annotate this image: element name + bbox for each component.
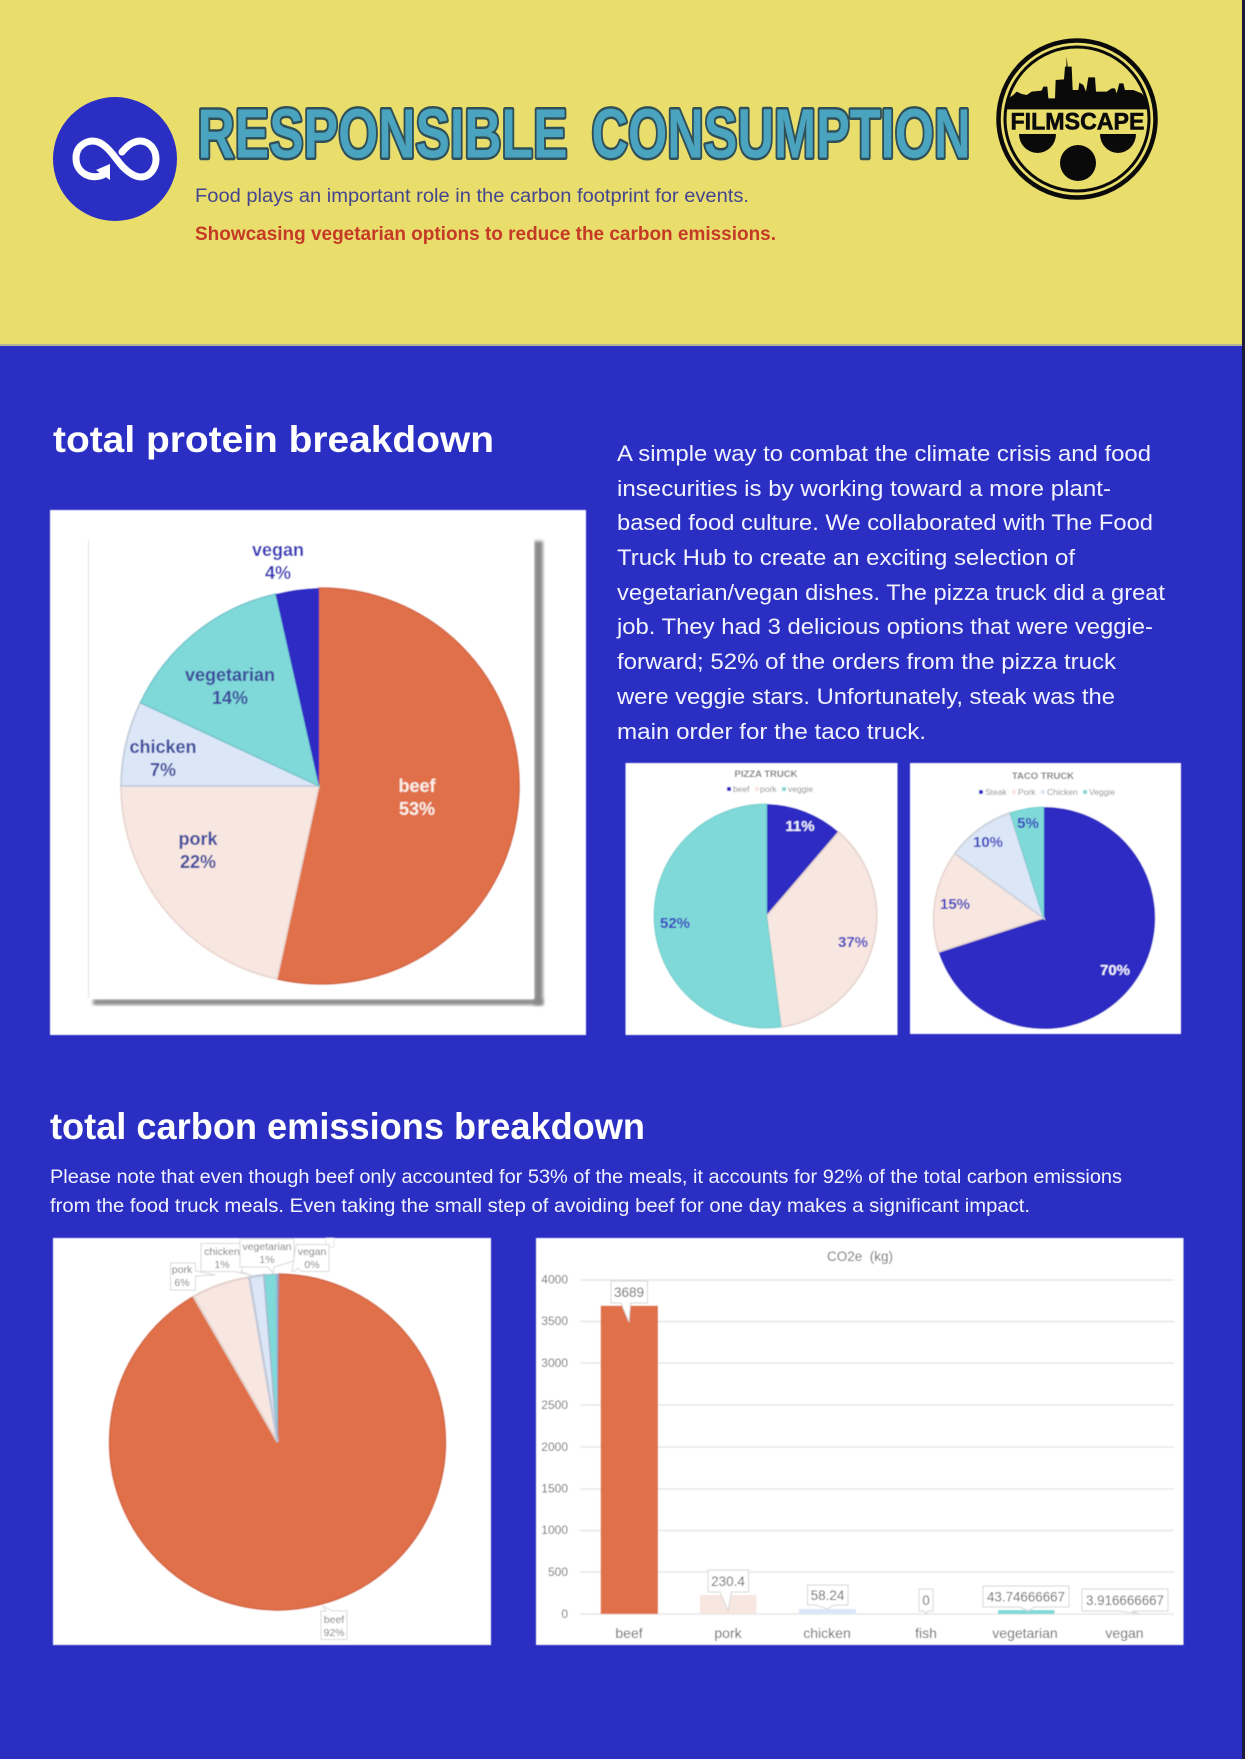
pie labels: 37% [838,934,868,951]
category labels: vegetarian [992,1625,1058,1641]
gridlines and y axis: 4000 [541,1272,568,1286]
callout labels: beef [324,1614,344,1626]
title [198,94,970,172]
gridlines and y axis: 3000 [541,1356,568,1370]
pie labels: vegan [252,540,304,560]
value callouts: 3.916666667 [1086,1593,1164,1608]
text block: plant-based intro paragraph: job. They had 3 delicious options that were veggie- [616,614,1153,639]
category labels: beef [615,1625,643,1641]
pie slice: beef [277,588,519,984]
pie labels [940,815,1130,979]
value callouts: 58.24 [811,1588,845,1603]
pie labels: 52% [660,915,690,932]
callout labels: chicken [204,1246,240,1258]
value callouts [611,1281,1168,1614]
pie slice: vegetarian [140,594,319,786]
chart title: PIZZA TRUCK [735,769,798,780]
gridlines and y axis: 2500 [541,1398,568,1412]
text block: carbon note: from the food truck meals. Even taking the small step of avoiding beef for one day makes a significant impact. [50,1196,1030,1217]
text block: plant-based intro paragraph: based food culture. We collaborated with The Food [617,510,1153,535]
icon: Filmscape logo [998,40,1156,198]
category labels [615,1625,1144,1641]
gridlines and y axis: 1000 [541,1523,568,1537]
legend [979,787,1115,797]
legend: Pork [1018,787,1036,797]
highlighted subtitle: Showcasing vegetarian options to reduce the carbon emissions. [195,224,776,245]
pie slice: pork [934,854,1044,952]
pie labels: 11% [785,818,815,835]
pie slice: chicken [955,813,1044,918]
text block: plant-based intro paragraph: forward; 52% of the orders from the pizza truck [617,649,1117,674]
panel: carbon emissions pie chart [53,1238,491,1645]
category labels: chicken [803,1625,851,1641]
legend: beef [733,784,750,794]
pie labels: beef [398,776,437,796]
callout labels: 0% [304,1259,320,1271]
subtitle: Food plays an important role in the carbon footprint for events. [195,186,749,207]
text block: carbon note [50,1167,1122,1217]
pie labels: 7% [150,760,176,780]
pie labels: 10% [973,834,1003,851]
legend: Chicken [1047,787,1078,797]
pie slice: veggie [654,804,781,1028]
heading: total carbon emissions breakdown: total carbon emissions breakdown [50,1106,645,1147]
gridlines and y axis: 0 [561,1607,568,1621]
panel: CO2e bar chart [536,1238,1184,1645]
title: CONSUMPTION [592,94,970,172]
pie labels: 70% [1100,962,1130,979]
pie labels: 14% [212,688,248,708]
heading: total protein breakdown: total protein breakdown [53,419,494,460]
pie labels [660,818,868,951]
panel: total protein pie chart [50,510,586,1035]
text block: plant-based intro paragraph [616,441,1165,744]
value callouts: 3689 [614,1285,644,1300]
category labels: vegan [1105,1625,1144,1641]
callout labels [170,1238,347,1640]
pie slice: vegan [277,1274,279,1442]
pie labels: 15% [940,896,970,913]
callout labels: 1% [259,1254,275,1266]
gridlines and y axis: 2000 [541,1440,568,1454]
callout labels: vegan [298,1246,326,1258]
pie labels: 53% [399,799,435,819]
legend [727,784,813,794]
pie labels: pork [178,829,218,849]
icon: infinity loop badge [53,97,177,221]
panel: taco truck pie chart [910,763,1181,1034]
legend: pork [760,784,777,794]
pie labels: 22% [180,852,216,872]
pie labels: 4% [265,563,291,583]
text block: plant-based intro paragraph: main order for the taco truck. [617,719,926,744]
callout labels: 1% [214,1259,230,1271]
value callouts: 43.74666667 [987,1590,1065,1604]
pie slice: chicken [121,703,319,786]
gridlines and y axis [541,1272,1174,1621]
pie slice: vegan [276,588,319,786]
legend: veggie [788,784,813,794]
icon: Filmscape logo: FILMSCAPE [1010,108,1144,136]
pie labels: vegetarian [185,665,275,685]
text block: carbon note: Please note that even though beef only accounted for 53% of the meals, it accounts for 92% of the total carbon emissions [50,1167,1122,1188]
value callouts: 0 [922,1593,930,1608]
text block: plant-based intro paragraph: Truck Hub to create an exciting selection of [617,545,1076,570]
category labels: pork [714,1625,743,1641]
pie slice: chicken [249,1275,278,1442]
text block: plant-based intro paragraph: insecurities is by working toward a more plant- [617,476,1111,501]
pie slice: pork [121,786,319,979]
pie slice: beef [109,1274,445,1610]
callout labels: 6% [174,1277,190,1289]
chart title: TACO TRUCK [1012,771,1074,782]
pie slice: pork [767,832,877,1027]
pie labels [129,540,437,872]
gridlines and y axis: 1500 [541,1482,568,1496]
text block: plant-based intro paragraph: were veggie stars. Unfortunately, steak was the [616,684,1115,709]
pie slice: vegetarian [264,1274,278,1442]
gridlines and y axis: 3500 [541,1314,568,1328]
callout labels: 92% [323,1627,345,1639]
legend: Steak [985,787,1007,797]
pie labels: chicken [129,737,197,757]
panel: pizza truck pie chart [626,763,898,1035]
value callouts: 230.4 [711,1574,745,1589]
title: RESPONSIBLE [198,94,568,172]
chart title: CO2e (kg) [827,1249,893,1264]
bars [601,1306,1054,1614]
text block: plant-based intro paragraph: vegetarian/vegan dishes. The pizza truck did a great [617,580,1165,605]
text block: plant-based intro paragraph: A simple way to combat the climate crisis and food [617,441,1151,466]
pie slice: steak [938,807,1155,1029]
pie slice: beef [767,804,839,916]
legend: Veggie [1089,787,1115,797]
pie labels: 5% [1017,815,1039,832]
pie slice: pork [194,1277,278,1442]
category labels: fish [915,1625,937,1641]
gridlines and y axis: 500 [548,1565,568,1579]
callout labels: vegetarian [242,1241,292,1253]
callout labels: pork [172,1264,193,1276]
pie slice: veggie [1010,807,1044,918]
